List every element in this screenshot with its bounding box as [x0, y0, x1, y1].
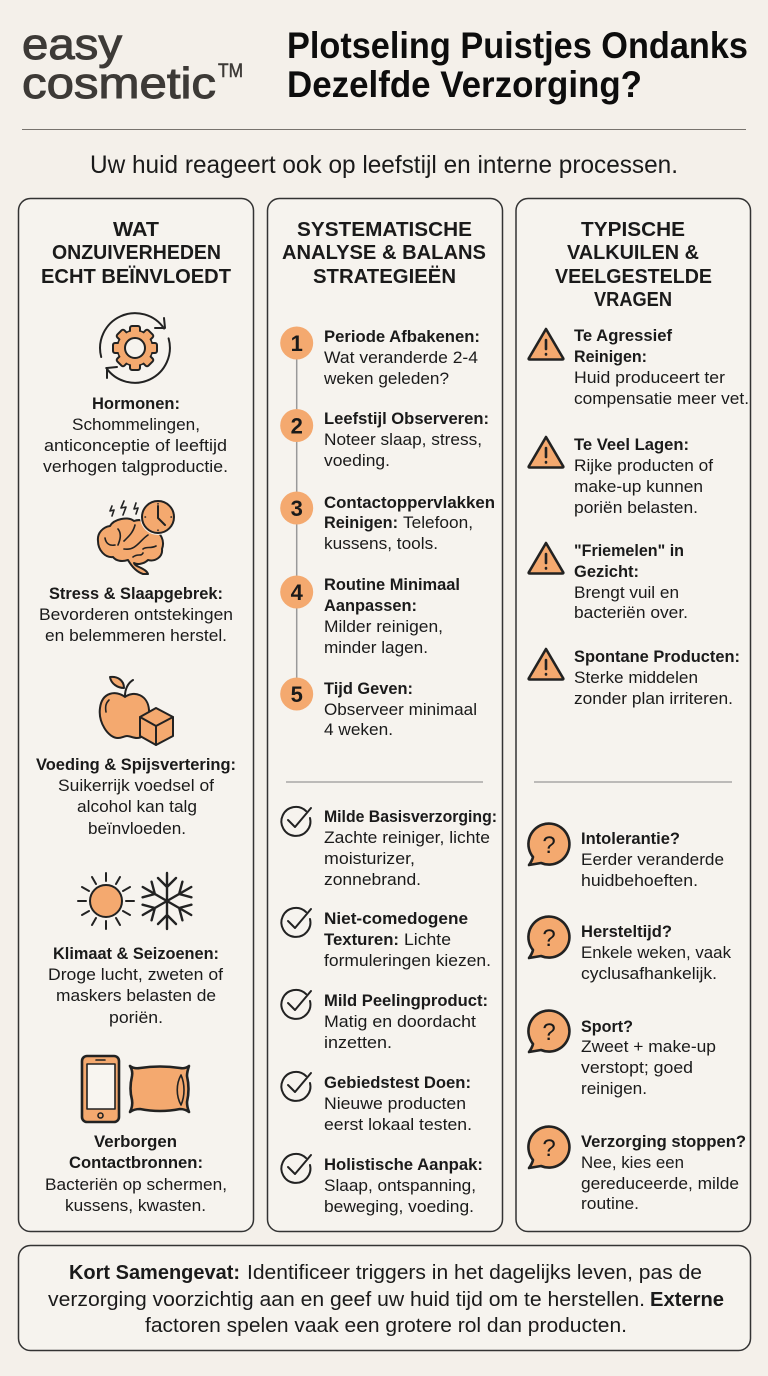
step 2 [280, 409, 489, 470]
question: sport: ? [542, 1019, 556, 1046]
heading: column 1: WAT [113, 219, 159, 241]
warning: spontane producten: zonder plan irriteren. [574, 689, 733, 708]
checklist: mild peelingproduct: Mild Peelingproduct: [324, 991, 488, 1010]
question: verzorging stoppen: gereduceerde, milde [581, 1174, 739, 1193]
checklist: gebiedstest doen [281, 1072, 472, 1134]
checklist: mild peelingproduct [281, 990, 488, 1052]
checklist: mild peelingproduct: Matig en doordacht [324, 1012, 476, 1031]
step 4: Routine Minimaal [324, 575, 460, 594]
heading: column 2: SYSTEMATISCHE [297, 219, 472, 241]
step 2: Noteer slaap, stress, [324, 430, 482, 449]
step 4: Aanpassen: [324, 596, 417, 615]
text: hormonen: Hormonen: [92, 394, 180, 413]
icon: brain with clock [98, 499, 176, 574]
heading: column 3: VRAGEN [594, 289, 672, 311]
question: sport: Sport? [581, 1017, 633, 1036]
checklist: niet-comedogene texturen: Lichte [404, 930, 451, 949]
step 3: kussens, tools. [324, 534, 438, 553]
step 1: 1 [291, 331, 303, 356]
step 3 [280, 492, 495, 553]
title [287, 25, 748, 105]
step 1 [280, 326, 480, 388]
text: voeding en spijsvertering: beïnvloeden. [88, 819, 186, 838]
warning: friemelen in gezicht: "Friemelen" in [574, 541, 684, 560]
question: intolerantie [528, 824, 724, 890]
heading: column 3 [555, 219, 712, 311]
text: hormonen: Schommelingen, [72, 415, 200, 434]
heading: column 3: VEELGESTELDE [555, 266, 712, 288]
text: stress en slaapgebrek: Bevorderen ontstekingen [39, 605, 233, 624]
step 3: Contactoppervlakken [324, 493, 495, 512]
text: voeding en spijsvertering: alcohol kan talg [77, 797, 197, 816]
question: sport: Zweet + make-up [581, 1037, 716, 1056]
step 5: Tijd Geven: [324, 679, 413, 698]
text: klimaat en seizoenen: Droge lucht, zweten of [48, 965, 223, 984]
warning: spontane producten: Spontane Producten: [574, 647, 740, 666]
checklist: holistische aanpak: beweging, voeding. [324, 1197, 474, 1216]
question: intolerantie: ? [542, 832, 556, 859]
warning: te veel lagen: Rijke producten of [574, 456, 713, 475]
text: klimaat en seizoenen: maskers belasten de [56, 986, 216, 1005]
warning: friemelen in gezicht: Gezicht: [574, 562, 639, 581]
icon: sun and snowflake [78, 873, 196, 929]
text: klimaat en seizoenen: poriën. [109, 1008, 163, 1027]
question: intolerantie: huidbehoeften. [581, 871, 698, 890]
checklist: milde basisverzorging: zonnebrand. [324, 870, 421, 889]
text: voeding en spijsvertering: Suikerrijk voedsel of [58, 776, 214, 795]
icon: gear with cycle arrows [100, 313, 170, 383]
question: verzorging stoppen: routine. [581, 1194, 639, 1213]
step 3: 3 [291, 496, 303, 521]
step 1: weken geleden? [323, 369, 449, 388]
heading: column 1: ONZUIVERHEDEN [52, 242, 221, 264]
checklist: gebiedstest doen: Nieuwe producten [324, 1094, 466, 1113]
subtitle: Uw huid reageert ook op leefstijl en interne processen. [90, 151, 678, 179]
text: voeding en spijsvertering: Voeding & Spijsvertering: [36, 755, 236, 774]
text: verborgen contactbronnen: Contactbronnen: [69, 1153, 203, 1172]
step 4: Milder reinigen, [324, 617, 443, 636]
warning: spontane producten: Sterke middelen [574, 668, 698, 687]
question: hersteltijd [528, 917, 731, 983]
logo [22, 20, 243, 108]
checklist: niet-comedogene texturen [281, 908, 491, 970]
text: stress en slaapgebrek: en belemmeren herstel. [45, 626, 227, 645]
question: verzorging stoppen: ? [542, 1135, 556, 1162]
heading: column 1: ECHT BEÏNVLOEDT [41, 265, 231, 288]
panel: wat onzuiverheden beinvloedt [18, 198, 254, 1232]
panel: kort samengevat: Externe [650, 1289, 724, 1311]
warning: te veel lagen: Te Veel Lagen: [574, 435, 689, 454]
heading: column 3: VALKUILEN & [567, 242, 699, 264]
heading: column 3: TYPISCHE [581, 219, 685, 241]
warning: te veel lagen: poriën belasten. [574, 498, 698, 517]
panel: kort samengevat: Kort Samengevat: [69, 1262, 240, 1284]
panel: valkuilen en vragen [516, 198, 750, 1232]
checklist: milde basisverzorging: moisturizer, [324, 849, 415, 868]
checklist: milde basisverzorging: Zachte reiniger, lichte [324, 828, 490, 847]
step 5: 5 [291, 682, 303, 707]
panel: kort samengevat: factoren spelen vaak een grotere rol dan producten. [145, 1315, 627, 1337]
panel: kort samengevat: Identificeer triggers in het dagelijks leven, pas de [247, 1262, 702, 1284]
logo: cosmetic [22, 59, 216, 108]
checklist: gebiedstest doen: Gebiedstest Doen: [324, 1073, 471, 1092]
warning: te agressief reinigen: Huid produceert ter [574, 368, 725, 387]
warning: te veel lagen [529, 435, 713, 517]
warning: te agressief reinigen: compensatie meer vet. [574, 389, 749, 408]
panel: kort samengevat [18, 1246, 750, 1350]
step 4: minder lagen. [324, 638, 428, 657]
checklist: holistische aanpak [281, 1154, 483, 1216]
warning: te agressief reinigen [529, 326, 749, 408]
warning: friemelen in gezicht: Brengt vuil en [574, 583, 679, 602]
step 2: 2 [291, 414, 303, 438]
step 4: 4 [291, 580, 304, 605]
text: verborgen contactbronnen: Bacteriën op schermen, [45, 1175, 227, 1194]
text: stress en slaapgebrek: Stress & Slaapgebrek: [49, 584, 223, 603]
question: intolerantie: Eerder veranderde [581, 850, 724, 869]
step 4 [280, 575, 460, 657]
checklist: gebiedstest doen: eerst lokaal testen. [324, 1115, 472, 1134]
checklist: milde basisverzorging [281, 807, 497, 889]
step 1: Wat veranderde 2-4 [324, 348, 478, 367]
checklist: mild peelingproduct: inzetten. [324, 1033, 392, 1052]
question: sport [528, 1011, 716, 1098]
text: hormonen: anticonceptie of leeftijd [44, 436, 227, 455]
text: verborgen contactbronnen: Verborgen [94, 1132, 177, 1151]
logo: TM [218, 61, 243, 82]
step 5 [280, 678, 477, 739]
question: sport: verstopt; goed [581, 1058, 693, 1077]
checklist: holistische aanpak: Holistische Aanpak: [324, 1155, 483, 1174]
step 3: Telefoon, [403, 513, 473, 532]
panel: systematische analyse [268, 198, 502, 1232]
checklist: niet-comedogene texturen: Niet-comedogene [324, 909, 468, 928]
checklist: holistische aanpak: Slaap, ontspanning, [324, 1176, 476, 1195]
checklist: milde basisverzorging: Milde Basisverzorging: [324, 807, 497, 826]
warning: spontane producten [529, 647, 740, 708]
text: voeding en spijsvertering [36, 755, 236, 838]
logo: easy [22, 20, 122, 69]
heading: column 2 [282, 219, 486, 288]
step 5: 4 weken. [324, 720, 393, 739]
question: hersteltijd: Hersteltijd? [581, 922, 672, 941]
heading: column 2: ANALYSE & BALANS [282, 242, 486, 264]
warning: te agressief reinigen: Reinigen: [574, 347, 647, 366]
step 5: Observeer minimaal [324, 700, 477, 719]
question: verzorging stoppen: Nee, kies een [581, 1153, 684, 1172]
question: verzorging stoppen: Verzorging stoppen? [581, 1132, 746, 1151]
question: hersteltijd: Enkele weken, vaak [581, 943, 731, 962]
warning: friemelen in gezicht: bacteriën over. [574, 603, 688, 622]
icon: phone and pillow [82, 1056, 189, 1122]
text: stress en slaapgebrek [39, 584, 233, 645]
text: hormonen: verhogen talgproductie. [43, 457, 228, 476]
warning: te agressief reinigen: Te Agressief [574, 326, 672, 345]
step 1: Periode Afbakenen: [324, 327, 480, 346]
warning: friemelen in gezicht [529, 541, 688, 622]
question: hersteltijd: ? [542, 925, 556, 952]
question: hersteltijd: cyclusafhankelijk. [581, 964, 717, 983]
title: Dezelfde Verzorging? [287, 64, 642, 105]
step 2: Leefstijl Observeren: [324, 409, 489, 428]
step 3: Reinigen: [324, 513, 398, 532]
heading: column 2: STRATEGIEËN [313, 265, 456, 288]
text: klimaat en seizoenen [48, 944, 223, 1027]
text: hormonen [43, 394, 228, 476]
checklist: niet-comedogene texturen: Texturen: [324, 930, 399, 949]
text: klimaat en seizoenen: Klimaat & Seizoenen: [53, 944, 219, 963]
warning: te veel lagen: make-up kunnen [574, 477, 703, 496]
text: verborgen contactbronnen [45, 1132, 227, 1215]
question: sport: reinigen. [581, 1079, 647, 1098]
checklist: niet-comedogene texturen: formuleringen kiezen. [324, 951, 491, 970]
icon: apple and sugar cube [100, 677, 173, 745]
step 2: voeding. [324, 451, 390, 470]
text: verborgen contactbronnen: kussens, kwasten. [65, 1196, 206, 1215]
panel: kort samengevat: verzorging voorzichtig aan en geef uw huid tijd om te herstellen. [48, 1289, 645, 1311]
heading: column 1 [41, 219, 231, 288]
question: intolerantie: Intolerantie? [581, 829, 680, 848]
question: verzorging stoppen [528, 1127, 746, 1213]
